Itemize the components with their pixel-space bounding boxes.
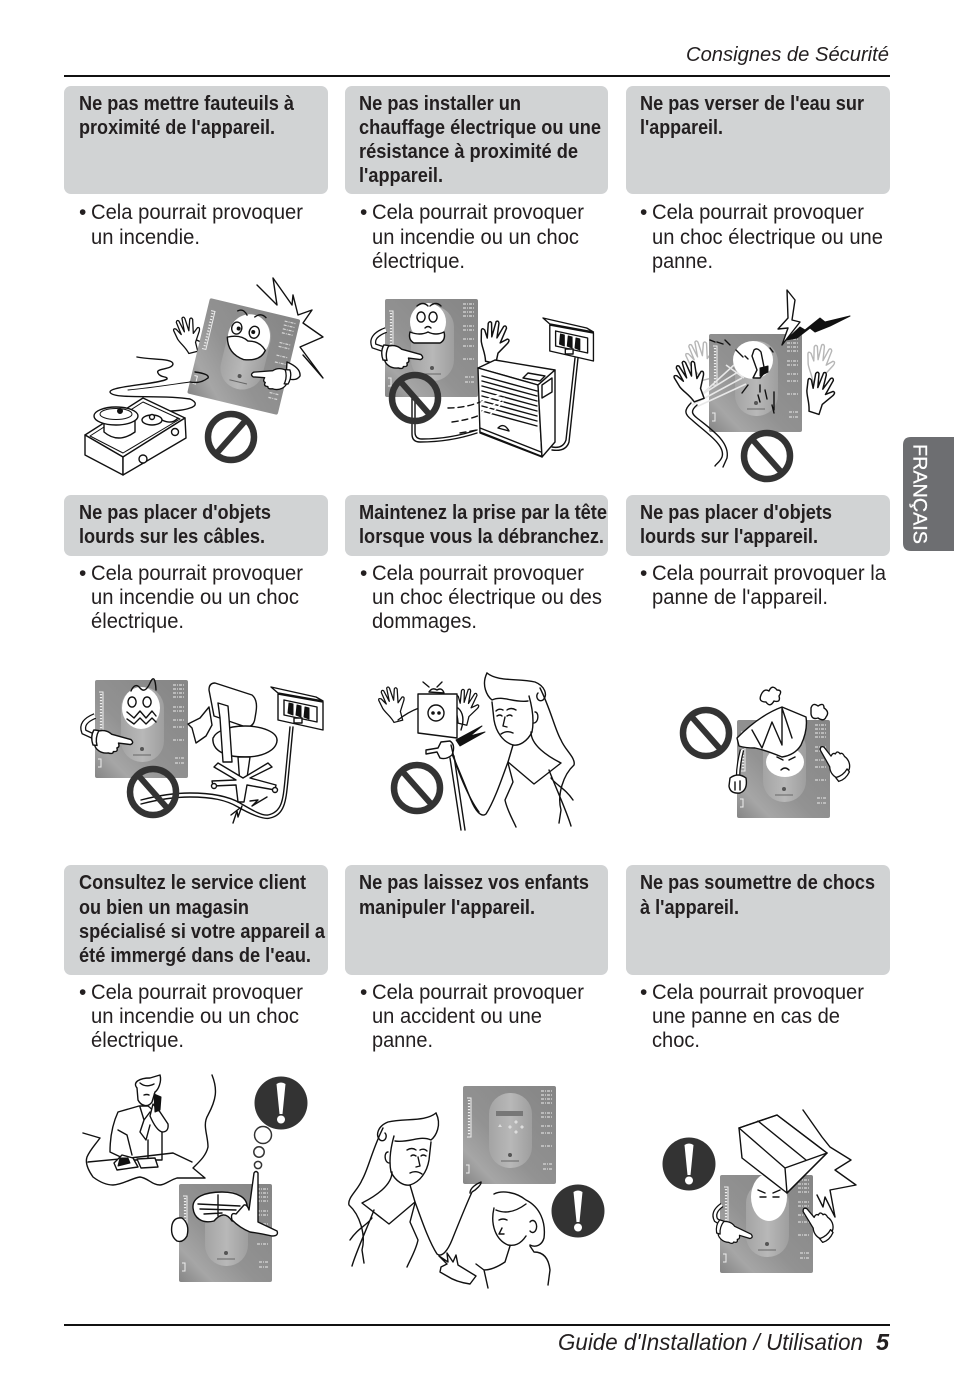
- heading: fauteuils: Ne pas mettre fauteuils à: [79, 93, 295, 115]
- text: incendie: un incendie.: [91, 226, 200, 249]
- text: incendie: [79, 201, 303, 249]
- heading: objets lourds: lourds sur l'appareil.: [640, 526, 818, 548]
- text: choc ou panne: •: [640, 201, 647, 224]
- panel: service client: [64, 865, 328, 1282]
- heading: objets lourds: Ne pas placer d'objets: [640, 502, 832, 524]
- heading: câbles: lourds sur les câbles.: [79, 526, 265, 548]
- heading: prise: lorsque vous la débranchez.: [359, 526, 604, 548]
- heading: service client: [64, 865, 328, 975]
- panel: chocs: [626, 865, 890, 1273]
- heading: câbles: Ne pas placer d'objets: [79, 502, 271, 524]
- icon: prohibited: [208, 414, 254, 460]
- text: panne: panne de l'appareil.: [652, 586, 828, 609]
- illustration: woman and child: [349, 1086, 604, 1288]
- panel: objets lourds: [626, 495, 890, 818]
- text: panne en cas de choc: [640, 981, 864, 1052]
- text: panne en cas de choc: choc.: [652, 1029, 700, 1052]
- text: incendie ou choc: [79, 981, 303, 1052]
- illustration: calling service: [83, 1075, 308, 1282]
- text: incendie ou choc: électrique.: [91, 610, 184, 633]
- heading: service client: spécialisé si votre appareil a: [79, 921, 326, 943]
- heading: prise: Maintenez la prise par la tête: [359, 502, 607, 524]
- illustration: chair on cable: [83, 679, 323, 823]
- text: incendie ou choc: [79, 562, 303, 633]
- icon: prohibited: [394, 765, 440, 811]
- heading: enfants: Ne pas laissez vos enfants: [359, 872, 589, 894]
- text: incendie ou choc: •: [360, 201, 367, 224]
- heading: prise: [345, 495, 608, 556]
- text: panne: [640, 562, 886, 609]
- text: accident ou panne: [360, 981, 584, 1052]
- text: accident ou panne: Cela pourrait provoquer: [372, 981, 584, 1004]
- text: panne en cas de choc: Cela pourrait provoquer: [652, 981, 864, 1004]
- panel: eau: [626, 86, 890, 479]
- text: incendie ou choc: électrique.: [91, 1029, 184, 1052]
- text: incendie ou choc: électrique.: [372, 250, 465, 273]
- text: incendie ou choc: Cela pourrait provoquer: [91, 562, 303, 585]
- text: choc ou panne: [640, 201, 883, 273]
- text: panne: Cela pourrait provoquer la: [652, 562, 886, 585]
- text: accident ou panne: panne.: [372, 1029, 433, 1052]
- heading: chauffage: l'appareil.: [359, 165, 443, 187]
- page header: Consignes de Sécurité: [686, 43, 889, 66]
- heading: chauffage: [345, 86, 608, 194]
- text: choc ou dommages: [360, 562, 602, 633]
- text: incendie: •: [79, 201, 86, 224]
- page footer: [64, 1324, 890, 1355]
- heading: chauffage: Ne pas installer un: [359, 93, 521, 115]
- illustration: stove near unit: [85, 278, 323, 475]
- illustration: box on unit: [662, 1110, 856, 1273]
- text: choc ou dommages: dommages.: [372, 610, 477, 633]
- icon: warning: [662, 1138, 716, 1190]
- text: incendie ou choc: un incendie ou un choc: [91, 586, 299, 609]
- text: choc ou dommages: •: [360, 562, 367, 585]
- heading: fauteuils: proximité de l'appareil.: [79, 117, 275, 139]
- icon: warning: [254, 1076, 308, 1130]
- heading: objets lourds: [626, 495, 890, 556]
- text: panne: •: [640, 562, 647, 585]
- heading: service client: été immergé dans de l'eau.: [79, 945, 311, 967]
- text: choc ou panne: un choc électrique ou une: [652, 226, 883, 249]
- side language tab: FRANÇAIS: [908, 444, 930, 544]
- text: accident ou panne: •: [360, 981, 367, 1004]
- panel: câbles: [64, 495, 328, 823]
- text: choc ou dommages: un choc électrique ou des: [372, 586, 602, 609]
- panel: chauffage: [345, 86, 608, 457]
- panel: enfants: [345, 865, 608, 1288]
- heading: service client: ou bien un magasin: [79, 897, 249, 919]
- panel: prise: [345, 495, 608, 830]
- text: incendie ou choc: [360, 201, 584, 273]
- icon: prohibited: [130, 769, 176, 815]
- panel: fauteuils: [64, 86, 328, 475]
- text: incendie ou choc: Cela pourrait provoquer: [91, 981, 303, 1004]
- heading: eau: [626, 86, 890, 194]
- text: incendie ou choc: •: [79, 562, 86, 585]
- text: choc ou panne: panne.: [652, 250, 713, 273]
- heading: fauteuils: [64, 86, 328, 194]
- page footer: 5: [876, 1329, 890, 1355]
- text: incendie ou choc: un incendie ou un choc: [372, 226, 579, 249]
- text: panne en cas de choc: •: [640, 981, 647, 1004]
- text: incendie: Cela pourrait provoquer: [91, 201, 303, 224]
- illustration: cushion on unit: [683, 687, 856, 818]
- heading: service client: Consultez le service client: [79, 872, 306, 894]
- text: choc ou panne: Cela pourrait provoquer: [652, 201, 864, 224]
- heading: chauffage: résistance à proximité de: [359, 141, 578, 163]
- text: choc ou dommages: Cela pourrait provoquer: [372, 562, 584, 585]
- heading: chocs: [626, 865, 890, 975]
- heading: chauffage: chauffage électrique ou une: [359, 117, 601, 139]
- text: accident ou panne: un accident ou une: [372, 1005, 542, 1028]
- illustration: heater near unit: [373, 299, 593, 457]
- illustration: woman pulling plug: [376, 673, 574, 830]
- icon: prohibited: [392, 375, 438, 421]
- text: incendie ou choc: •: [79, 981, 86, 1004]
- illustration: water on unit: [670, 290, 850, 479]
- text: incendie ou choc: Cela pourrait provoquer: [372, 201, 584, 224]
- side language tab: [903, 437, 954, 551]
- heading: chocs: Ne pas soumettre de chocs: [640, 872, 875, 894]
- heading: eau: l'appareil.: [640, 117, 723, 139]
- heading: eau: Ne pas verser de l'eau sur: [640, 93, 864, 115]
- heading: câbles: [64, 495, 328, 556]
- page footer: Guide d'Installation / Utilisation: [558, 1329, 863, 1355]
- icon: prohibited: [683, 710, 729, 756]
- heading: enfants: manipuler l'appareil.: [359, 897, 535, 919]
- icon: prohibited: [744, 433, 790, 479]
- text: panne en cas de choc: une panne en cas de: [652, 1005, 840, 1028]
- heading: chocs: à l'appareil.: [640, 897, 739, 919]
- heading: enfants: [345, 865, 608, 975]
- text: incendie ou choc: un incendie ou un choc: [91, 1005, 299, 1028]
- icon: warning: [552, 1184, 604, 1238]
